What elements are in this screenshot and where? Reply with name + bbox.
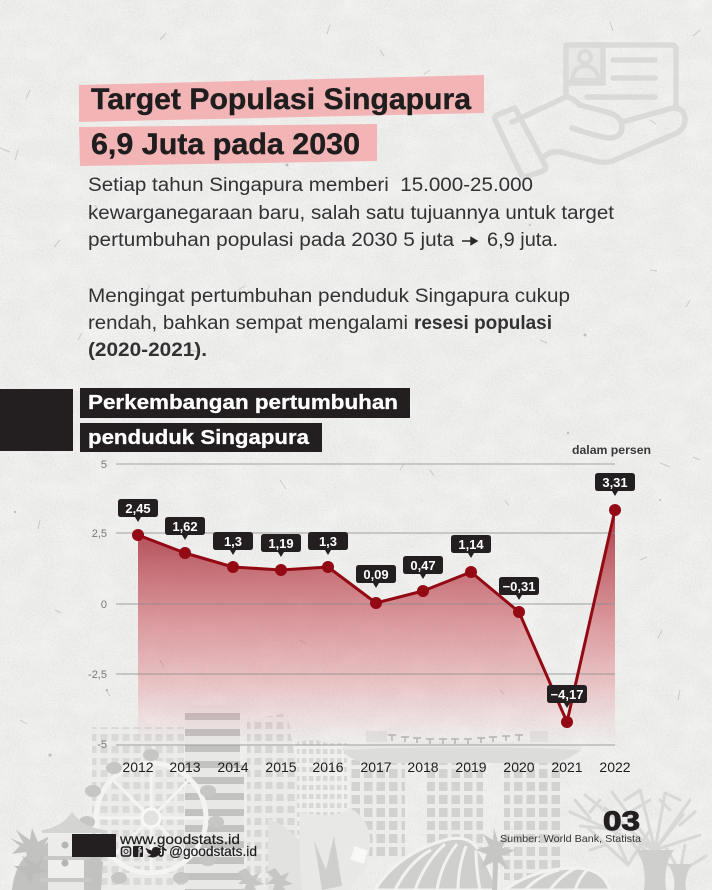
title band 1 [79,75,484,122]
data points [132,504,621,728]
source note: Sumber: World Bank, Statista [500,833,641,845]
value 2017: 0,09 [363,567,389,582]
y axis labels: -2,5 [88,669,107,681]
x axis labels: 2014 [217,759,249,775]
text block: intro paragraphs: 6,9 juta. [487,230,558,251]
value 2018 [403,556,443,579]
heading line 2: penduduk Singapura [88,426,310,449]
value 2021: −4,17 [551,687,583,702]
area line chart: population growth [88,459,635,775]
icon: arrow [462,238,477,244]
value 2018: 0,47 [410,558,436,573]
building: striped tower [185,705,244,890]
text block: intro paragraphs: kewarganegaraan baru, salah satu tujuannya untuk target [88,203,615,224]
y axis labels [88,459,107,751]
illustration: Singapore skyline [10,705,706,890]
text block: intro paragraphs: Mengingat pertumbuhan penduduk Singapura cukup [88,286,570,307]
heading line 1: Perkembangan pertumbuhan [88,391,398,414]
value 2016 [308,532,348,555]
supertrees [570,790,706,890]
grid lines [116,464,615,745]
marina bay sands [342,731,583,880]
page number: 03 [603,806,640,836]
pagoda and palms [10,812,105,890]
text block: intro paragraphs: pertumbuhan populasi pada 2030 5 juta [88,230,454,251]
social handle: @goodstats.id [169,843,257,859]
building: left block [92,727,184,890]
value 2013: 1,62 [172,519,198,534]
y axis labels: 5 [101,459,107,471]
title line 1: Target Populasi Singapura [91,83,471,116]
x axis labels: 2016 [312,759,344,775]
logo block [72,834,116,857]
data line [138,510,615,722]
social icons [122,846,166,858]
x axis labels: 2018 [407,759,439,775]
unit note: dalam persen [572,445,651,457]
palms [238,828,516,890]
text block: intro paragraphs: resesi populasi [414,313,552,334]
x axis labels [122,759,631,775]
value 2017 [356,565,396,588]
value 2020: −0,31 [503,579,535,594]
heading bar 2 [80,423,322,452]
value 2014: 1,3 [224,534,242,549]
text block: intro paragraphs [88,175,615,361]
title: highlighted heading [79,75,484,166]
value 2020 [499,577,539,600]
ferris wheel [79,749,224,884]
building: right tower [247,713,305,890]
website: www.goodstats.id [119,831,240,847]
icon: hand holding ID card [495,45,685,177]
title band 2 [79,124,377,166]
x axis labels: 2017 [360,759,392,775]
x axis labels: 2012 [122,759,154,775]
x axis labels: 2013 [169,759,201,775]
chart heading block [0,388,410,452]
footer: goodstats brand [72,831,257,859]
gardens by the bay domes [375,838,610,890]
art science museum [268,808,370,890]
x axis labels: 2020 [503,759,535,775]
building: back block [297,739,347,890]
x axis labels: 2022 [599,759,631,775]
text block: intro paragraphs: (2020-2021). [88,340,207,361]
heading bar 1 [80,388,410,418]
title line 2: 6,9 Juta pada 2030 [91,128,360,161]
y axis labels: -5 [97,739,107,751]
x axis labels: 2015 [265,759,297,775]
y axis labels: 2,5 [92,528,107,540]
text block: intro paragraphs: rendah, bahkan sempat mengalami [88,313,408,334]
x axis labels: 2021 [551,759,583,775]
value 2021 [547,685,587,708]
area fill [138,510,615,745]
value 2012 [118,499,158,522]
value 2019 [451,535,491,558]
value 2019: 1,14 [458,537,484,552]
value 2022: 3,31 [602,475,628,490]
y axis labels: 0 [101,599,107,611]
value 2015 [261,534,301,557]
value 2022 [595,473,635,496]
text block: intro paragraphs: Setiap tahun Singapura memberi 15.000-25.000 [88,175,533,196]
value 2012: 2,45 [125,501,151,516]
value 2013 [165,517,205,540]
black accent block [0,389,73,451]
value 2016: 1,3 [319,534,337,549]
x axis labels: 2019 [455,759,487,775]
value 2015: 1,19 [268,536,294,551]
value 2014 [213,532,253,555]
value labels [118,473,635,708]
